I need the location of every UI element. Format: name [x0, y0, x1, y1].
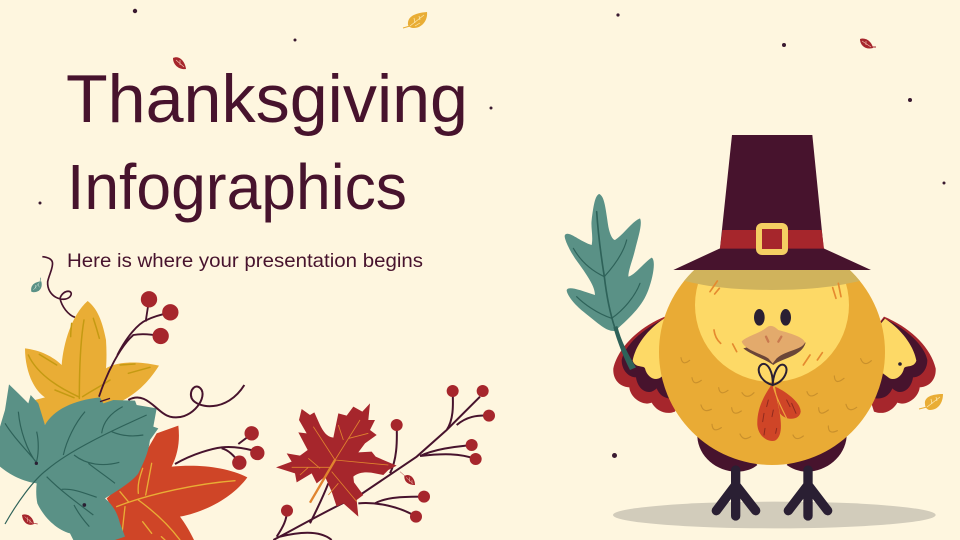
feet [716, 470, 828, 516]
second vine [128, 385, 244, 417]
body [659, 239, 885, 465]
small red leaf bottom [22, 514, 38, 525]
right red berry sprig [175, 426, 264, 470]
right wing [856, 317, 936, 413]
gold leaf [25, 301, 159, 425]
wattle [757, 386, 801, 441]
chest feathers [681, 358, 871, 439]
small leaf: red top left [173, 57, 186, 69]
held oak leaf [565, 194, 654, 370]
berry sprig [99, 291, 178, 397]
title: Infographics [67, 151, 407, 223]
face ticks [710, 281, 841, 365]
curly vine top [42, 257, 75, 317]
title [66, 61, 468, 223]
thighs [697, 437, 847, 472]
small teal leaf [31, 278, 42, 292]
beak [742, 326, 806, 365]
small leaf: red top right [860, 39, 876, 49]
vine end over green leaf [100, 398, 110, 402]
left leaf cluster [0, 257, 264, 540]
small leaf: orange top [403, 12, 427, 28]
hat [673, 135, 871, 270]
subtitle: Here is where your presentation begins [67, 250, 423, 272]
bow knot [759, 364, 787, 385]
ground shadow [613, 502, 936, 528]
maple leaf [276, 403, 397, 517]
green leaf [0, 384, 158, 540]
title: Thanksgiving [66, 61, 468, 137]
small red leaf [400, 472, 415, 485]
red-orange leaf [107, 426, 247, 540]
overlay dots on turkey wing [898, 362, 902, 366]
maple branch [273, 385, 495, 540]
face [695, 228, 849, 382]
turkey illustration [565, 135, 936, 528]
hat shadow [684, 270, 860, 290]
left wing [613, 317, 693, 413]
eyes [754, 309, 791, 326]
small leaf: gold right [919, 394, 943, 410]
